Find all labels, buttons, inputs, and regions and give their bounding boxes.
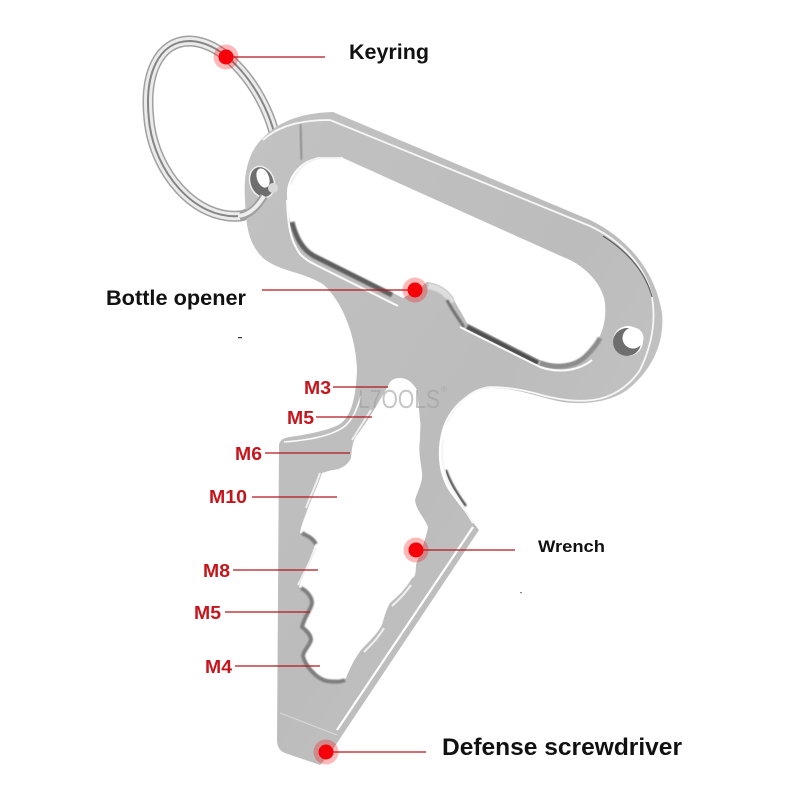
icon: split keyring <box>148 41 274 216</box>
callout: wrench <box>404 537 605 562</box>
size label: M5 upper: M5 <box>287 407 314 428</box>
watermark: ® <box>441 385 447 394</box>
size label: M10 <box>209 486 337 507</box>
tip crease <box>280 713 337 735</box>
right neck highlight <box>442 440 473 523</box>
size label: M5 lower: M5 <box>194 602 221 623</box>
bump shadow <box>447 300 464 327</box>
right neck dark bevel <box>446 470 466 506</box>
callout: defense screwdriver: Defense screwdriver <box>442 734 682 761</box>
rim dark line <box>603 236 652 297</box>
slot lower-right highlight <box>460 327 592 371</box>
body silhouette with slot and wrench opening <box>245 112 662 765</box>
slot lower-right dark bevel <box>467 327 538 363</box>
size label: M5 upper <box>287 407 372 428</box>
ring highlight <box>238 196 264 216</box>
callout: bottle opener <box>106 278 428 310</box>
size label: M6: M6 <box>235 443 262 464</box>
callout: defense screwdriver <box>314 734 682 764</box>
size label: M8 <box>203 560 318 581</box>
right hole <box>613 326 644 356</box>
size label: M4 <box>205 656 320 677</box>
ring passing through the left hole <box>240 196 264 216</box>
size label: M6 <box>235 443 350 464</box>
stray mark <box>520 592 522 593</box>
slot top bevel <box>291 158 343 185</box>
callout: wrench: Wrench <box>538 537 605 556</box>
size label: M5 lower <box>194 602 310 623</box>
left hole with ring inside <box>245 163 279 201</box>
watermark: L7OOLS <box>358 384 440 414</box>
shoulder highlight <box>284 396 361 442</box>
size label: M4: M4 <box>205 656 233 677</box>
slot lower-left dark bevel <box>292 222 392 295</box>
tool body: steel bottle opener and wrench <box>238 112 662 765</box>
outer rim highlight <box>263 120 654 425</box>
crease at top of head <box>300 124 302 160</box>
wrench edge highlights <box>298 410 411 652</box>
slot lower-left highlight <box>287 200 398 306</box>
callout: keyring <box>214 41 429 70</box>
opener bump bevel <box>428 286 452 303</box>
stray mark <box>238 337 242 338</box>
callout: bottle opener: Bottle opener <box>106 287 246 310</box>
size label: M10: M10 <box>209 486 247 507</box>
size label: M3 <box>304 377 388 398</box>
slot corner soft shading <box>540 338 600 366</box>
size label: M3: M3 <box>304 377 331 398</box>
size label: M8: M8 <box>203 560 230 581</box>
diagonal blade highlight <box>337 527 473 730</box>
callout: keyring: Keyring <box>349 41 429 64</box>
wrench tooth shading <box>301 533 345 682</box>
